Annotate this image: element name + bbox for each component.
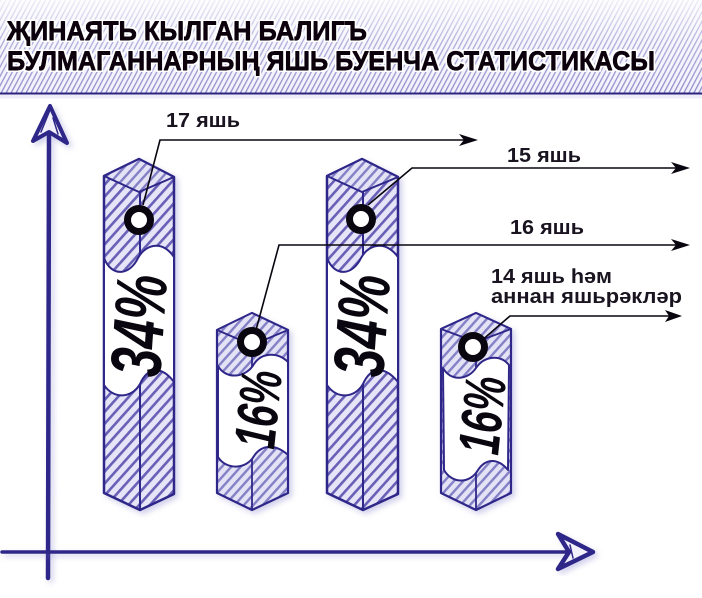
bar: 15 яшь (327, 159, 398, 510)
percent labels: 16% (222, 367, 295, 451)
leader: 16 яшь (256, 217, 690, 330)
header band (0, 0, 702, 98)
leader: 14 яшь һәм аннан яшьрәкләр (480, 266, 682, 342)
bar: 16 яшь (217, 313, 288, 510)
percent labels (96, 272, 519, 457)
bar: 17 яшь (104, 159, 174, 510)
percent labels: 16% (446, 373, 519, 457)
percent labels: 34% (96, 272, 183, 379)
x axis with arrow (2, 534, 593, 569)
leader: 14 яшь һәм аннан яшьрәкләр: 14 яшь һәм (491, 266, 612, 288)
leader: 15 яшь: 15 яшь (507, 145, 581, 167)
bar: 14 яшь һәм аннан яшьрәкләр (441, 313, 511, 510)
leader: 17 яшь (143, 110, 478, 205)
title: ҖИНАЯТЬ КЫЛГАН БАЛИГЪ (6, 16, 367, 46)
title (6, 16, 655, 76)
percent labels: 34% (319, 272, 406, 379)
tag holes (128, 208, 484, 358)
leader: 16 яшь: 16 яшь (510, 217, 584, 239)
title: БУЛМАГАННАРНЫҢ ЯШЬ БУЕНЧА СТАТИСТИКАСЫ (7, 46, 655, 76)
leader: 17 яшь: 17 яшь (166, 110, 240, 132)
y axis with arrow (33, 106, 67, 578)
leader: 15 яшь (368, 145, 690, 205)
leader: 14 яшь һәм аннан яшьрәкләр: аннан яшьрәкләр (491, 286, 682, 308)
